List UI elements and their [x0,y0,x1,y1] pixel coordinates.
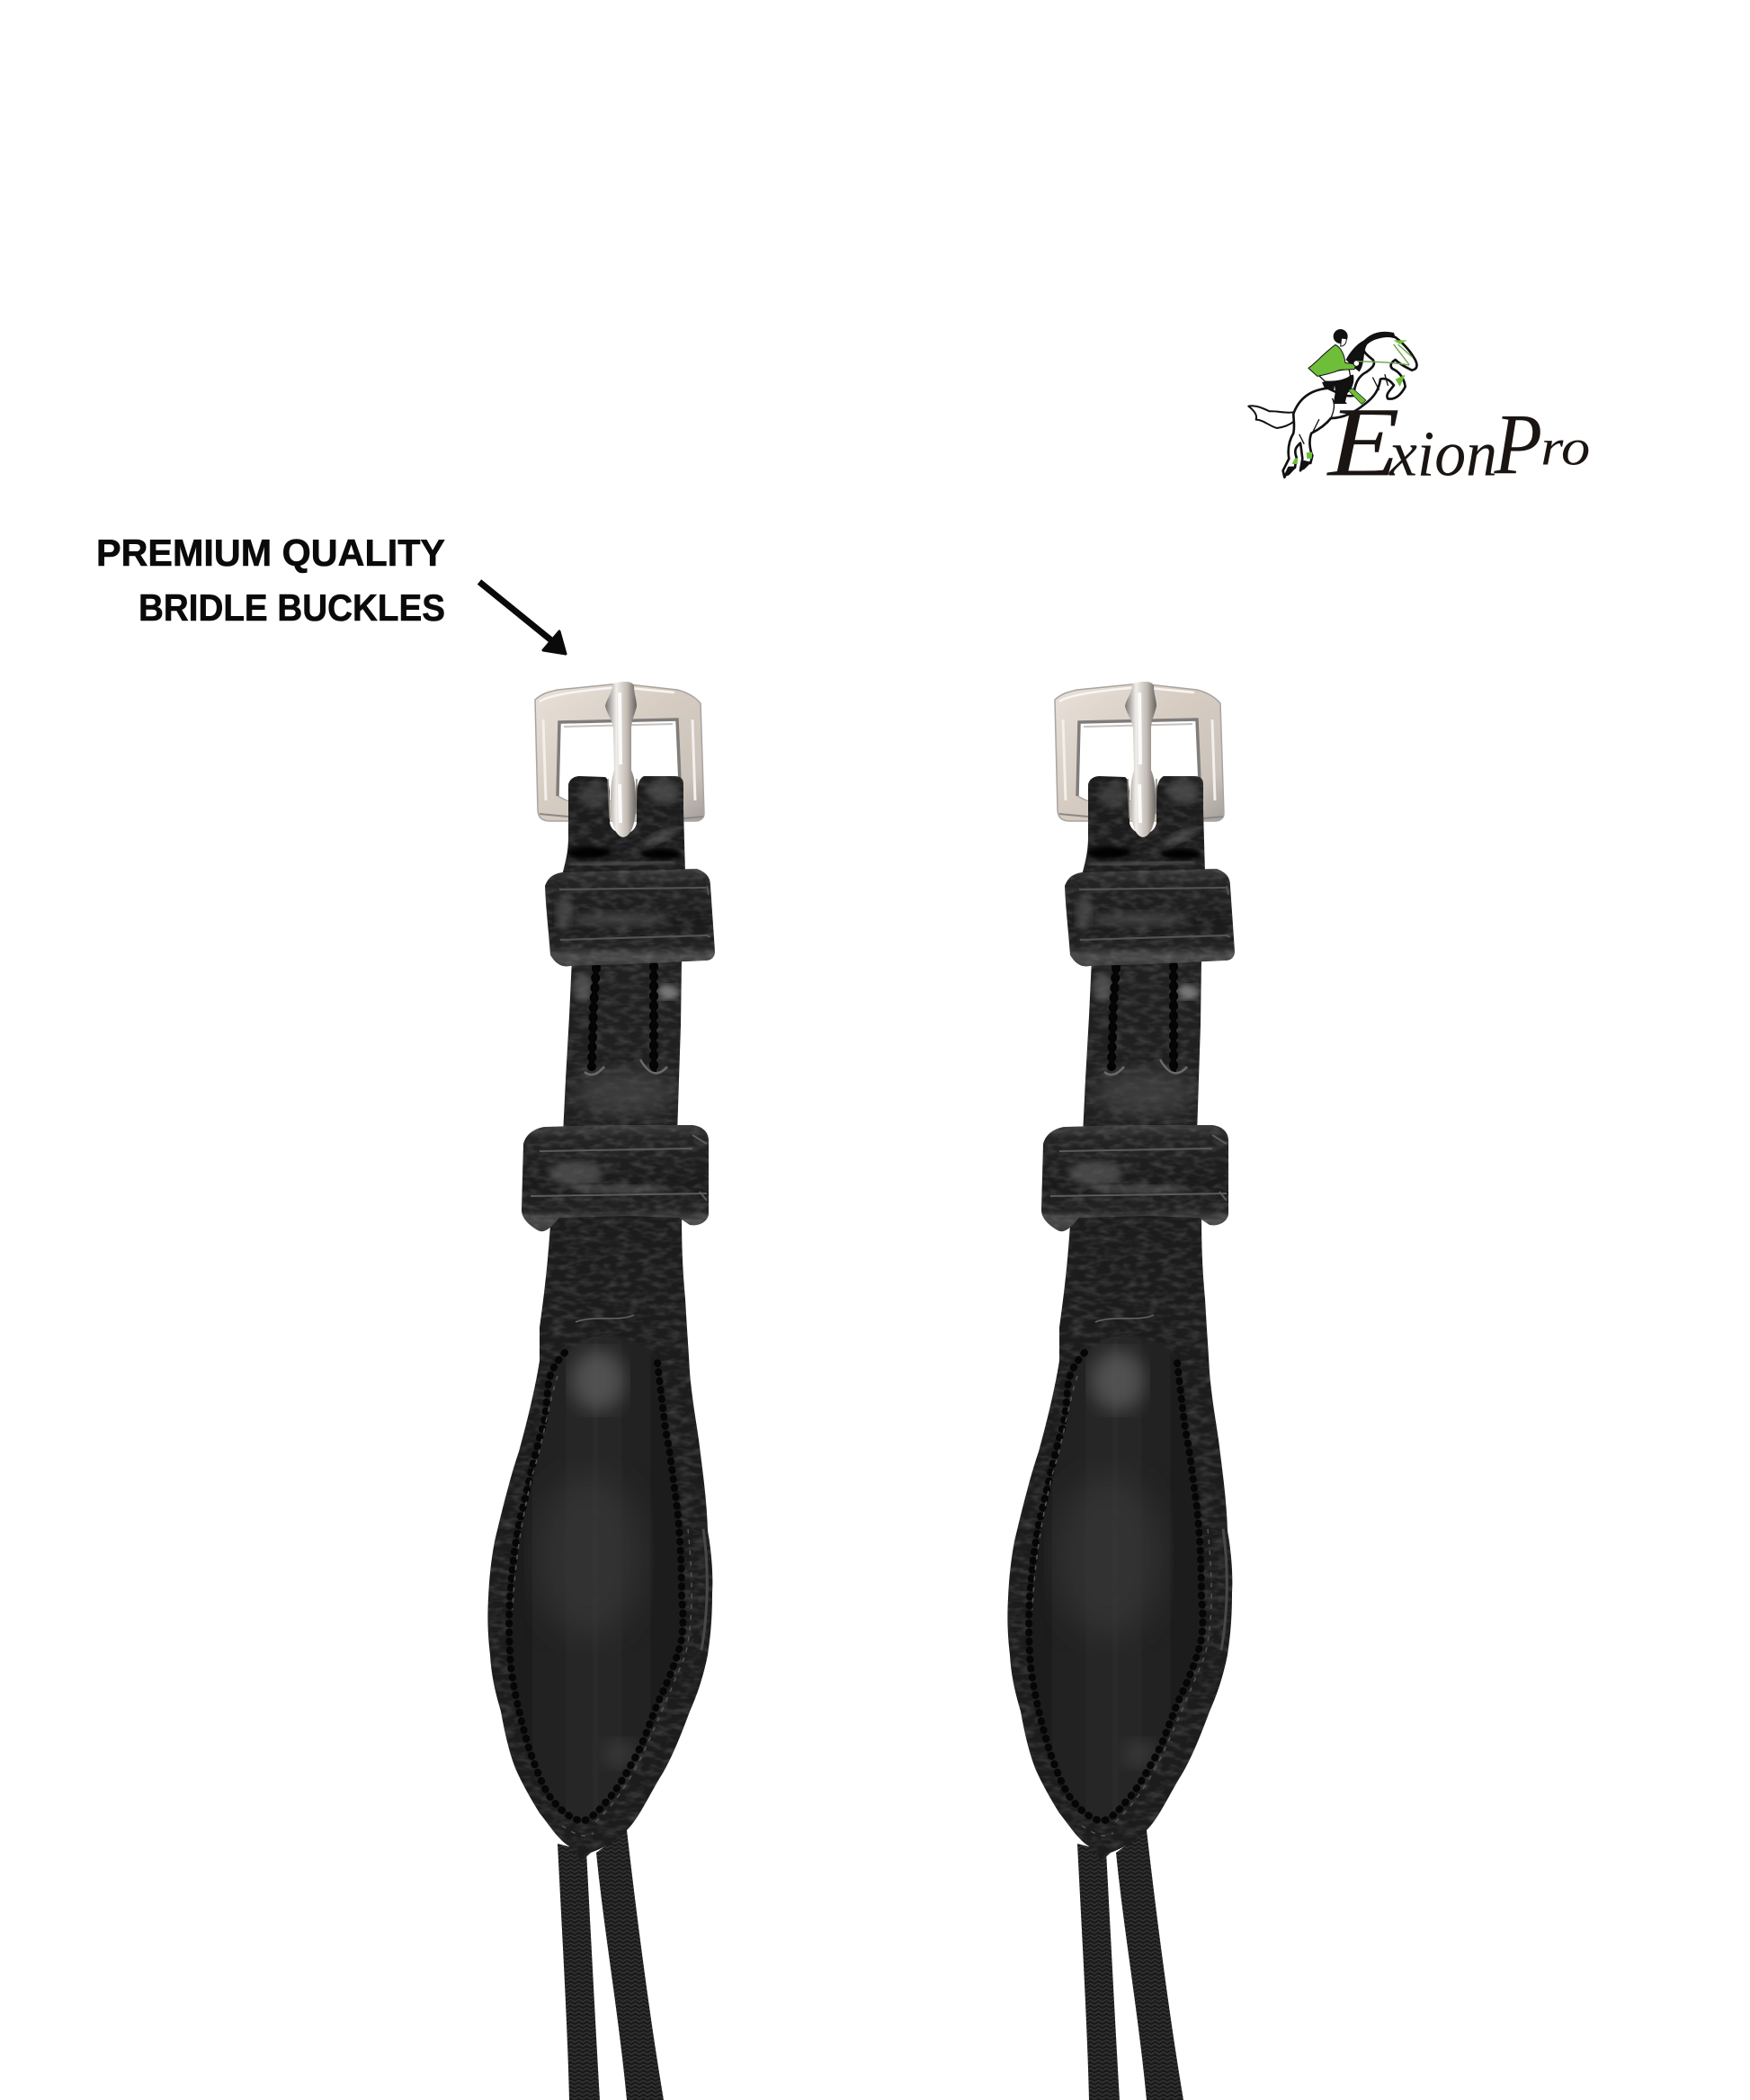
logo wordmark: P [1494,397,1542,493]
text: premium quality bridle buckles [96,532,445,629]
left strap middle with stitching [563,959,682,1135]
left ropes [558,1830,664,2100]
left buckle [535,684,704,821]
logo wordmark [1326,387,1590,496]
arrow: pointing to buckle [479,582,566,654]
right upper keeper [1065,869,1235,966]
right lower keeper [1041,1125,1228,1231]
left strap top [562,776,685,876]
logo wordmark: E [1326,387,1400,496]
text: premium quality bridle buckles: BRIDLE BUCKLES [138,586,445,629]
left lower keeper [522,1125,709,1231]
right strap top [1082,776,1205,876]
right strap assembly [1007,682,1235,2100]
left leather pouch [487,1210,712,1861]
right buckle tongue [1125,682,1156,837]
right strap middle with stitching [1083,959,1201,1135]
infographic canvas [98,329,1588,2100]
left buckle tongue [605,682,637,837]
text: premium quality bridle buckles: PREMIUM QUALITY [96,532,445,574]
logo rider [1334,375,1353,404]
left upper keeper [545,869,715,966]
right ropes [1077,1830,1183,2100]
logo wordmark: xion [1388,418,1497,489]
right leather pouch [1007,1210,1232,1861]
left strap assembly [487,682,715,2100]
logo: ExionPro [1248,329,1590,496]
logo wordmark: ro [1540,421,1590,477]
right buckle [1055,684,1224,821]
logo horse [1248,329,1416,478]
